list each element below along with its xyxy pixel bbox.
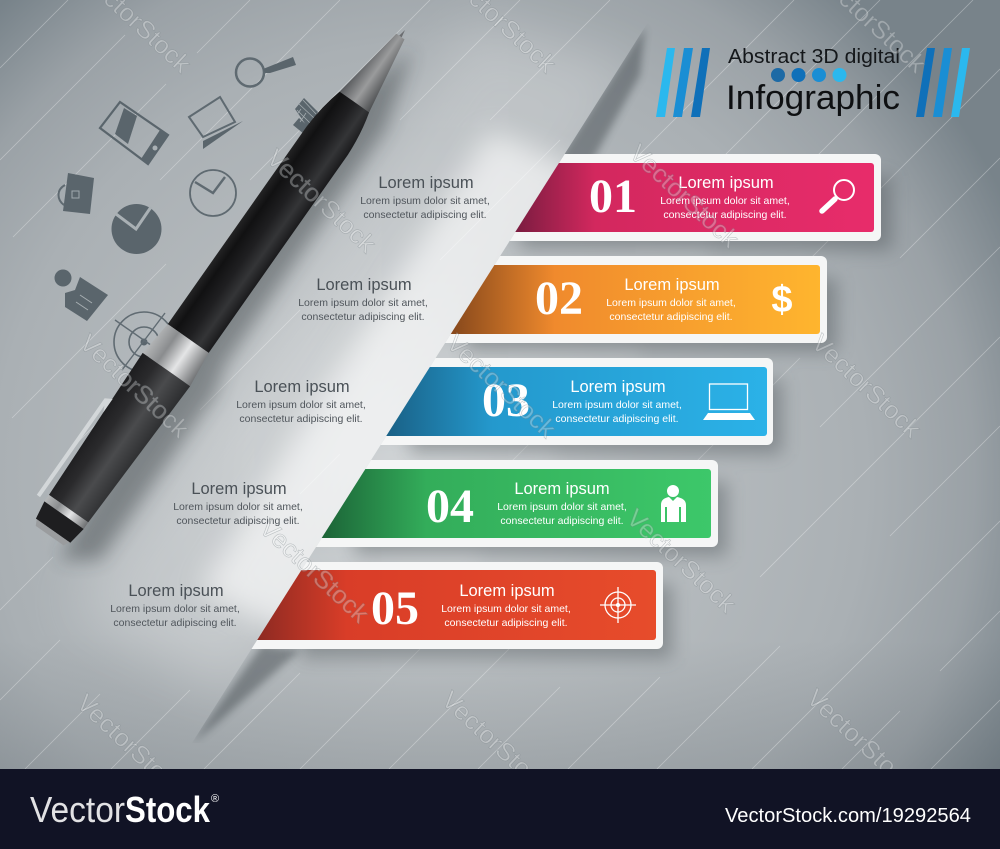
pen lower barrel [45,353,190,525]
pen end cap [33,501,84,545]
watermarks: VectorStock [621,504,741,619]
step 04 text [426,480,627,533]
icon: dollar: $ [771,279,793,321]
step 04 text: consectetur adipiscing elit. [500,515,624,527]
left text 2: Lorem ipsum [316,276,412,294]
title line 1: Abstract 3D digital [728,46,900,68]
step 01 text: 01 [589,170,637,223]
step 04 text: Lorem ipsum dolor sit amet, [497,501,627,513]
watermarks: VectorStock [801,684,921,799]
step 03 text: Lorem ipsum dolor sit amet, [552,399,682,411]
step 05 text: Lorem ipsum [459,582,555,600]
step 02 text: Lorem ipsum [624,276,720,294]
icon group: business icons [54,57,318,372]
card icons [600,180,854,623]
left text 1: Lorem ipsum dolor sit amet, [360,195,490,207]
step 05 text: Lorem ipsum dolor sit amet, [441,603,571,615]
watermarks: VectorStock [254,514,374,629]
left text 4: Lorem ipsum dolor sit amet, [173,501,303,513]
paper sheet [88,26,614,683]
icon: target [114,312,175,372]
icon: businessman [661,485,686,522]
header [656,46,970,117]
left text 5: Lorem ipsum dolor sit amet, [110,603,240,615]
step 04 text: Lorem ipsum [514,480,610,498]
watermarks: VectorStock [436,686,556,801]
panel: steps [240,154,892,658]
icon: laptop [703,384,755,420]
step 02 text: Lorem ipsum dolor sit amet, [606,297,736,309]
step 03 text: Lorem ipsum [570,378,666,396]
left text 4 [173,480,303,527]
footer logo: Stock [125,789,211,830]
card shadows [300,176,892,658]
pen clip [37,395,113,499]
left text 1: consectetur adipiscing elit. [363,209,487,221]
light glow [290,250,710,562]
left text 1: Lorem ipsum [378,174,474,192]
step 01 text [589,170,790,223]
icon: magnifying glass [236,57,296,86]
step 03 text: consectetur adipiscing elit. [555,413,679,425]
left text 3: Lorem ipsum [254,378,350,396]
card 02 [425,256,827,343]
left text 2: Lorem ipsum dolor sit amet, [298,297,428,309]
footer logo: Vector [30,789,125,830]
icon: pie chart [112,204,162,254]
step 04 text: 04 [426,480,474,533]
left stripes [656,48,710,117]
watermarks: VectorStock [71,689,191,804]
left text blocks [110,174,490,629]
left text 3: Lorem ipsum dolor sit amet, [236,399,366,411]
icon: briefcase [58,173,94,214]
watermarks: VectorStock [624,139,744,254]
icon: building [293,98,318,134]
dots [771,68,846,82]
icon: magnifier [822,180,854,211]
watermarks: VectorStock [441,329,561,444]
left text 5: Lorem ipsum [128,582,224,600]
footer logo: ® [211,793,219,805]
icon: clock [190,170,236,216]
watermarks: VectorStock [261,144,381,259]
card labels [371,170,790,635]
step 05 text: 05 [371,582,419,635]
pen steel collar [143,322,212,386]
pen shadow [60,50,412,560]
step 02 text [535,272,736,325]
pen upper barrel [168,88,375,353]
step 03 text: 03 [482,374,530,427]
step 05 text: consectetur adipiscing elit. [444,617,568,629]
step 01 text: Lorem ipsum [678,174,774,192]
card 01 [480,154,881,241]
footer id: VectorStock.com/19292564 [725,805,971,827]
left text 4: consectetur adipiscing elit. [176,515,300,527]
icon: person [54,270,108,321]
card 03 [365,358,773,445]
footer bar [0,769,1000,849]
icon: laptop [189,97,243,149]
pen ring [44,495,88,529]
title line 2: Infographic [726,79,900,117]
left text 3: consectetur adipiscing elit. [239,413,363,425]
icon: crosshair [600,587,636,623]
pen knurled end [33,519,69,547]
icon: tablet [100,102,168,164]
footer logo [30,789,219,830]
step 03 text [482,374,682,427]
step 02 text: consectetur adipiscing elit. [609,311,733,323]
pen tip [340,20,420,112]
card 04 [300,460,718,547]
watermarks: VectorStock [806,329,926,444]
step 05 text [371,582,571,635]
card 05 [240,562,663,649]
left text 4: Lorem ipsum [191,480,287,498]
paper edge shadow [192,27,645,743]
left text 2: consectetur adipiscing elit. [301,311,425,323]
watermarks: VectorStock [74,329,194,444]
left text 2 [298,276,428,323]
left text 5 [110,582,240,629]
pen [22,10,429,552]
right stripes [916,48,970,117]
left text 1 [360,174,490,221]
left text 3 [236,378,366,425]
step 02 text: 02 [535,272,583,325]
step 01 text: Lorem ipsum dolor sit amet, [660,195,790,207]
left text 5: consectetur adipiscing elit. [113,617,237,629]
step 01 text: consectetur adipiscing elit. [663,209,787,221]
